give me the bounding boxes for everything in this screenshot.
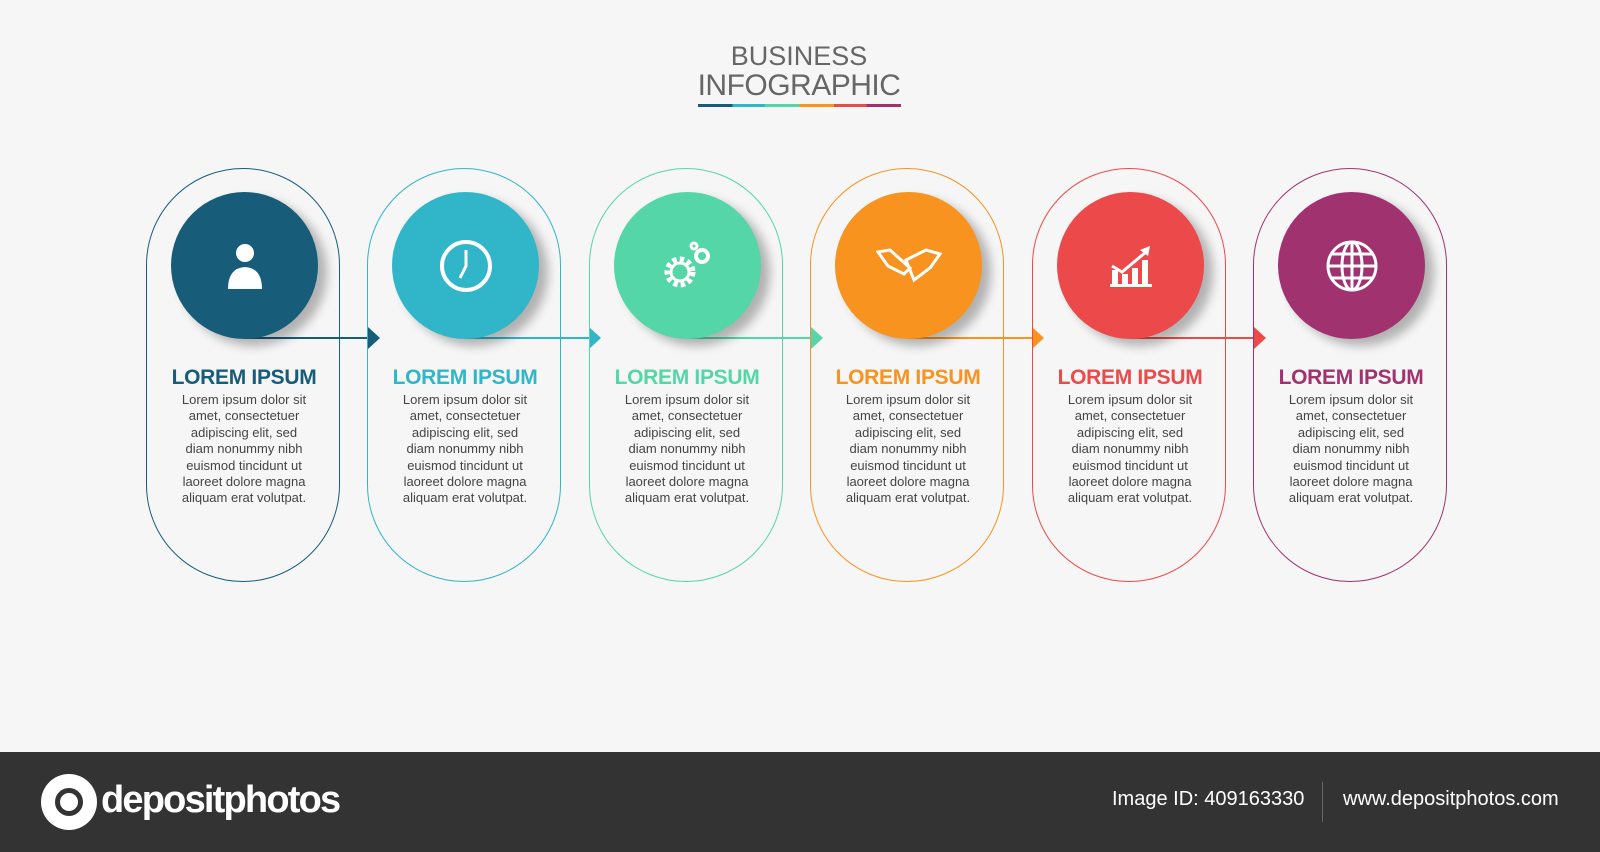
panel 3: Lorem ipsum dolor sit	[625, 392, 749, 407]
panel 1: amet, consectetuer	[189, 408, 299, 423]
panel 1: laoreet dolore magna	[183, 474, 305, 489]
title: BUSINESS	[731, 41, 867, 71]
panel 3: LOREM IPSUM	[615, 366, 759, 389]
panel 1: LOREM IPSUM	[172, 366, 316, 389]
panel 3: adipiscing elit, sed	[634, 425, 740, 440]
panel 2: LOREM IPSUM	[393, 366, 537, 389]
panel 1: Lorem ipsum dolor sit	[182, 392, 306, 407]
icon circle 4	[835, 192, 982, 339]
panel 2: Lorem ipsum dolor sit	[403, 392, 527, 407]
icon circle 5	[1057, 192, 1204, 339]
panel 6: laoreet dolore magna	[1290, 474, 1412, 489]
panel 2: adipiscing elit, sed	[412, 425, 518, 440]
panel 1	[146, 168, 380, 582]
panel 4: euismod tincidunt ut	[850, 458, 966, 473]
panel 5: laoreet dolore magna	[1069, 474, 1191, 489]
icon circle 2	[392, 192, 539, 339]
panel 2: aliquam erat volutpat.	[403, 490, 527, 505]
title: INFOGRAPHIC	[698, 69, 900, 102]
panel 6: euismod tincidunt ut	[1293, 458, 1409, 473]
panel 6	[1253, 168, 1447, 582]
panel 4: Lorem ipsum dolor sit	[846, 392, 970, 407]
panel 5: diam nonummy nibh	[1071, 441, 1189, 456]
title	[698, 41, 900, 102]
panel 4	[810, 168, 1044, 582]
panel 2: euismod tincidunt ut	[407, 458, 523, 473]
footer image id: Image ID: 409163330	[1112, 788, 1304, 810]
icon circle 6	[1278, 192, 1425, 339]
panel 4: adipiscing elit, sed	[855, 425, 961, 440]
panel 5: aliquam erat volutpat.	[1068, 490, 1192, 505]
panel 3: euismod tincidunt ut	[629, 458, 745, 473]
arrow 5	[1130, 337, 1256, 339]
panel 6: aliquam erat volutpat.	[1289, 490, 1413, 505]
arrow 1	[244, 337, 370, 339]
panel 4: diam nonummy nibh	[849, 441, 967, 456]
panel 5: LOREM IPSUM	[1058, 366, 1202, 389]
panel 6: amet, consectetuer	[1296, 408, 1406, 423]
panel 3: laoreet dolore magna	[626, 474, 748, 489]
panel 5	[1032, 168, 1266, 582]
panel 3: amet, consectetuer	[632, 408, 742, 423]
arrow 4	[908, 337, 1034, 339]
footer website: www.depositphotos.com	[1343, 788, 1559, 810]
panel 4: amet, consectetuer	[853, 408, 963, 423]
panel 4: laoreet dolore magna	[847, 474, 969, 489]
panel 6: diam nonummy nibh	[1292, 441, 1410, 456]
panel 1: euismod tincidunt ut	[186, 458, 302, 473]
panel 5: adipiscing elit, sed	[1077, 425, 1183, 440]
panel 6: adipiscing elit, sed	[1298, 425, 1404, 440]
icon circle 3	[614, 192, 761, 339]
panel 6: Lorem ipsum dolor sit	[1289, 392, 1413, 407]
panel 3: aliquam erat volutpat.	[625, 490, 749, 505]
footer logo: depositphotos	[101, 779, 339, 821]
arrow 2	[465, 337, 591, 339]
footer logo	[41, 774, 340, 830]
panel 2: laoreet dolore magna	[404, 474, 526, 489]
panel 5: Lorem ipsum dolor sit	[1068, 392, 1192, 407]
panel 5: euismod tincidunt ut	[1072, 458, 1188, 473]
panel 3	[589, 168, 823, 582]
title underline	[698, 104, 901, 107]
panel 1: diam nonummy nibh	[185, 441, 303, 456]
panel 2: diam nonummy nibh	[406, 441, 524, 456]
panel 1: aliquam erat volutpat.	[182, 490, 306, 505]
panel 5: amet, consectetuer	[1075, 408, 1185, 423]
panel 6: LOREM IPSUM	[1279, 366, 1423, 389]
panel 4: LOREM IPSUM	[836, 366, 980, 389]
icon circle 1	[171, 192, 318, 339]
arrow 3	[687, 337, 813, 339]
panel 4: aliquam erat volutpat.	[846, 490, 970, 505]
panel 3: diam nonummy nibh	[628, 441, 746, 456]
panel 2: amet, consectetuer	[410, 408, 520, 423]
panel 1: adipiscing elit, sed	[191, 425, 297, 440]
footer bar	[0, 752, 1600, 852]
panel 2	[367, 168, 601, 582]
